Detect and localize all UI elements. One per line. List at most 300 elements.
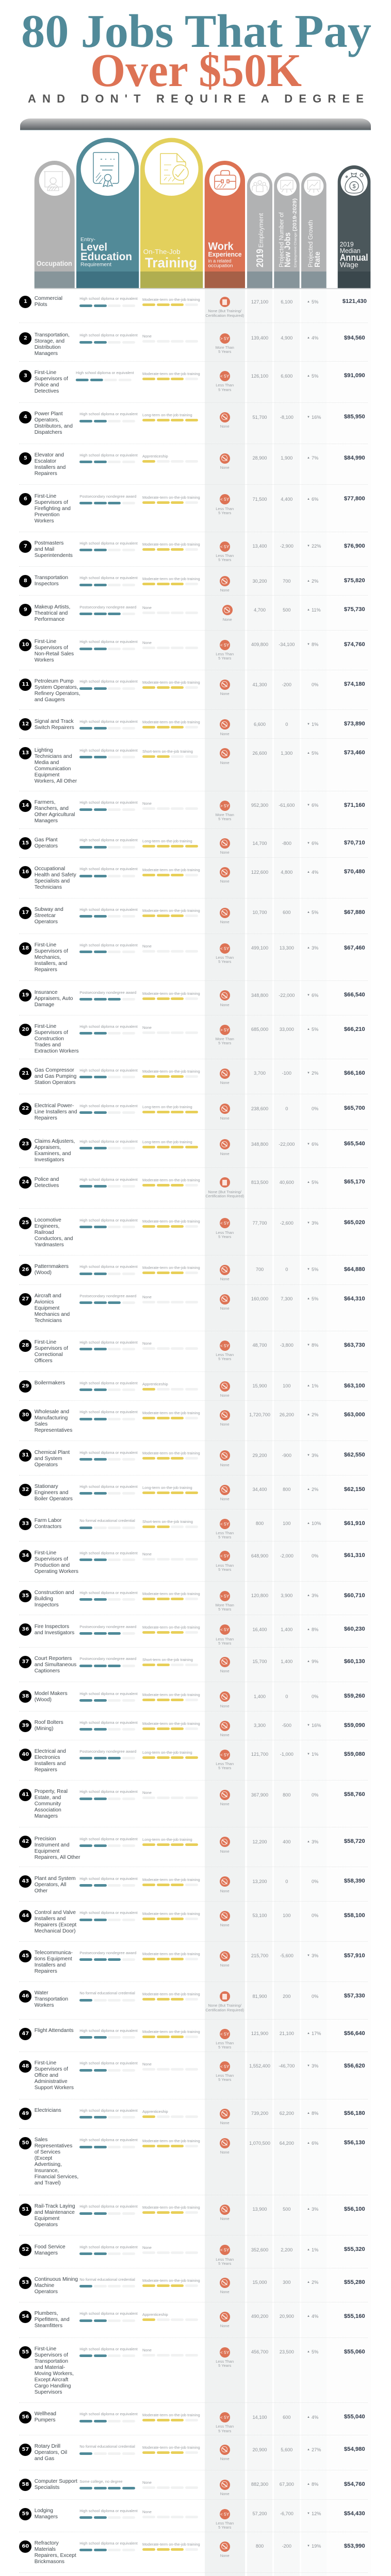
icon: experience <box>220 2245 230 2255</box>
row 23: Claims Adjusters, Appraisers, Examiners, and Investigators: High school diploma or equivalent <box>79 1139 138 1144</box>
row 56: Wellhead Pumpers: 5 Years <box>218 2429 231 2433</box>
education bars <box>79 2452 135 2455</box>
training bars <box>142 419 198 421</box>
row 19: Insurance Appraisers, Auto Damage: Damage <box>35 1002 54 1008</box>
row 4: Power Plant Operators, Distributors, and Dispatchers: ▼ <box>307 415 310 418</box>
row 34: First-Line Supervisors of Production and Operating Workers: 0% <box>312 1553 318 1558</box>
row 5: Elevator and Escalator Installers and Repairers: 28,900 <box>252 455 267 461</box>
row 48: First-Line Supervisors of Office and Administrative Support Workers: Supervisors of <box>35 2066 68 2072</box>
row 35: Construction and Building Inspectors: $60,710 <box>344 1592 365 1599</box>
row 9: Makeup Artists, Theatrical and Performance: ▲ <box>307 608 310 612</box>
training bars <box>142 2486 198 2489</box>
row 13: Lighting Technicians and Media and Communication Equipment Workers: High school diploma or equivalent <box>79 748 138 753</box>
row 42: Precision Instrument and Equipment Repairers, All Other: 12,200 <box>252 1839 267 1844</box>
row 13: Lighting Technicians and Media and Communication Equipment Workers: Lighting <box>35 748 53 753</box>
row 21: Gas Compressor and Gas Pumping Station Operators: Gas Compressor <box>35 1067 74 1073</box>
title block <box>21 5 371 105</box>
icon: experience <box>220 2312 230 2322</box>
row 35: Construction and Building Inspectors: 120,800 <box>251 1593 268 1598</box>
row 56: Wellhead Pumpers <box>0 2402 391 2435</box>
panel: education header: Requirement <box>80 262 111 268</box>
education bars <box>79 2549 135 2551</box>
row 18: First-Line Supervisors of Mechanics, Installers, and Repairers: Less Than <box>216 955 234 960</box>
row 41: Property, Real Estate, and Community Association Managers: High school diploma or equivalent <box>79 1789 138 1794</box>
education bars <box>79 613 135 615</box>
row 9: Makeup Artists, Theatrical and Performance: $75,730 <box>344 606 365 613</box>
row 47: Flight Attendants: $56,640 <box>344 2030 365 2037</box>
row 2: Transportation, Storage, and Distribution Managers: 139,400 <box>251 335 268 341</box>
row 58: Computer Support Specialists: 8% <box>312 2482 318 2487</box>
row 34: First-Line Supervisors of Production and Operating Workers: Production and <box>35 1563 70 1568</box>
row 26: Patternmakers (Wood): Patternmakers <box>35 1264 69 1269</box>
row 5: Elevator and Escalator Installers and Repairers: High school diploma or equivalent <box>79 453 138 457</box>
icon: experience <box>222 605 233 615</box>
row 55: First-Line Supervisors of Transportation and Material-Moving Workers: Except Aircraft <box>35 2377 68 2383</box>
row 33: Farm Labor Contractors: 5 Years <box>218 1535 231 1539</box>
row 1: Commercial Pilots: ▲ <box>307 300 310 303</box>
row 52: Food Service Managers: 352,600 <box>251 2247 268 2252</box>
row 26: Patternmakers (Wood): $64,880 <box>344 1266 365 1273</box>
training bars <box>142 1388 198 1391</box>
row 8: Transportation Inspectors: 700 <box>283 579 290 584</box>
row 54: Plumbers, Pipefitters, and Steamfitters: Plumbers, <box>35 2311 58 2316</box>
panel: work experience header <box>205 161 245 288</box>
row 47: Flight Attendants: 47 <box>22 2031 29 2037</box>
row 11: Petroleum Pump System Operators, Refinery Operators, and Gaugers: Moderate-term on-the-job training <box>142 680 200 685</box>
row 42: Precision Instrument and Equipment Repairers, All Other: Repairers, All Other <box>35 1855 80 1860</box>
training bars <box>142 1417 198 1419</box>
row 7: Postmasters and Mail Superintendents: 7 <box>24 544 27 549</box>
education bars <box>79 1598 135 1601</box>
icon: document with check <box>160 154 188 184</box>
row 57: Rotary Drill Operators, Oil and Gas: Operators, Oil <box>35 2450 67 2455</box>
row 2: Transportation, Storage, and Distribution Managers: Distribution <box>35 345 61 350</box>
row 3: First-Line Supervisors of Police and Detectives: 3 <box>24 373 27 379</box>
row 56: Wellhead Pumpers: Pumpers <box>35 2417 55 2423</box>
training bars <box>142 1146 198 1148</box>
row 32: Stationary Engineers and Boiler Operators: Long-term on-the-job training <box>142 1485 192 1490</box>
row 45: Telecommunications Equipment Installers and Repairers: $57,910 <box>344 1953 365 1959</box>
row 7: Postmasters and Mail Superintendents: Moderate-term on-the-job training <box>142 542 200 547</box>
row 5: Elevator and Escalator Installers and Repairers: Apprenticeship <box>142 454 168 459</box>
row 15: Gas Plant Operators: Gas Plant <box>35 837 57 843</box>
education bars <box>79 2036 135 2039</box>
panel: training header: Training <box>145 255 197 270</box>
row 11: Petroleum Pump System Operators, Refinery Operators, and Gaugers: $74,180 <box>344 681 365 687</box>
row 59: Lodging Managers: 5 Years <box>218 2525 231 2530</box>
icon: experience <box>220 1381 230 1392</box>
education bars <box>79 549 135 551</box>
row 30: Wholesale and Manufacturing Sales Representatives: 30 <box>22 1412 29 1418</box>
row 23: Claims Adjusters, Appraisers, Examiners, and Investigators: 348,800 <box>251 1142 268 1147</box>
row 27: Aircraft and Avionics Equipment Mechanics and Technicians: Postsecondary nondegree award <box>79 1294 136 1298</box>
education bars <box>79 2420 135 2422</box>
icon: experience <box>220 719 230 730</box>
row 14: Farmers, Ranchers, and Other Agricultural Managers: Ranchers, and <box>35 806 69 811</box>
row 51: Rail-Track Laying and Maintenance Equipment Operators: High school diploma or equivalent <box>79 2204 138 2209</box>
row 43: Plant and System Operators, All Other: Moderate-term on-the-job training <box>142 1877 200 1882</box>
row 14: Farmers, Ranchers, and Other Agricultural Managers: 14 <box>22 803 29 808</box>
row 33: Farm Labor Contractors: Less Than <box>216 1531 234 1535</box>
row 12: Signal and Track Switch Repairers: None <box>220 732 230 736</box>
row 14: Farmers, Ranchers, and Other Agricultural Managers: $71,160 <box>344 802 365 808</box>
icon: experience: < 5Y <box>220 1627 229 1632</box>
row 53: Continuous Mining Machine Operators: $55,280 <box>344 2279 365 2285</box>
row 57: Rotary Drill Operators, Oil and Gas: None <box>220 2456 230 2461</box>
education bars <box>79 1458 135 1461</box>
row 39: Roof Bolters (Mining): 16% <box>312 1723 321 1728</box>
row 29: Boilermakers: None <box>220 1393 230 1398</box>
row 51: Rail-Track Laying and Maintenance Equipment Operators: Equipment <box>35 2216 59 2222</box>
row 46: Water Transportation Workers: 0% <box>312 1994 318 1999</box>
training bars <box>142 950 198 953</box>
row 47: Flight Attendants: Flight Attendants <box>35 2028 74 2033</box>
row 39: Roof Bolters (Mining): (Mining) <box>35 1726 53 1732</box>
row 38: Model Makers (Wood): 0 <box>285 1694 288 1699</box>
row 5: Elevator and Escalator Installers and Repairers: 5 <box>24 455 27 461</box>
row 37: Court Reporters and Simultaneous Captioners: ▲ <box>307 1660 310 1663</box>
icon: experience <box>220 2205 230 2215</box>
row 56: Wellhead Pumpers: High school diploma or equivalent <box>79 2412 138 2416</box>
row 4: Power Plant Operators, Distributors, and Dispatchers: Distributors, and <box>35 423 73 429</box>
row 38: Model Makers (Wood): (Wood) <box>35 1697 52 1703</box>
row 27: Aircraft and Avionics Equipment Mechanics and Technicians: 5% <box>312 1296 318 1301</box>
row 11: Petroleum Pump System Operators, Refinery Operators, and Gaugers: -200 <box>282 682 291 687</box>
row 55: First-Line Supervisors of Transportation and Material-Moving Workers: 55 <box>22 2349 29 2355</box>
education bars <box>79 584 135 586</box>
row 52: Food Service Managers: $55,320 <box>344 2246 365 2252</box>
row 52: Food Service Managers: 52 <box>22 2247 29 2252</box>
panel: 2019 employment header <box>247 173 272 288</box>
education bars <box>79 915 135 918</box>
education bars <box>79 1999 135 2002</box>
row 58: Computer Support Specialists: None <box>220 2492 230 2496</box>
row 55: First-Line Supervisors of Transportation and Material-Moving Workers: 456,700 <box>251 2349 268 2354</box>
row 8: Transportation Inspectors: ▲ <box>307 580 310 583</box>
row 40: Electrical and Electronics Installers and Repairers: 5 Years <box>218 1766 231 1770</box>
row 14: Farmers, Ranchers, and Other Agricultural Managers: 952,300 <box>251 803 268 808</box>
row 34: First-Line Supervisors of Production and Operating Workers <box>0 1541 391 1581</box>
row 38: Model Makers (Wood): None <box>220 1704 230 1708</box>
row 30: Wholesale and Manufacturing Sales Representatives: None <box>220 1422 230 1427</box>
row 39: Roof Bolters (Mining): -500 <box>282 1723 291 1728</box>
row 59: Lodging Managers: High school diploma or equivalent <box>79 2509 138 2513</box>
row 6: First-Line Supervisors of Firefighting and Prevention Workers: $77,800 <box>344 496 365 502</box>
row 56: Wellhead Pumpers: Moderate-term on-the-job training <box>142 2413 200 2417</box>
row 36: Fire Inspectors and Investigators: 5 Years <box>218 1641 231 1646</box>
row 2: Transportation, Storage, and Distribution Managers: High school diploma or equivalent <box>79 333 138 337</box>
row 53: Continuous Mining Machine Operators: Machine <box>35 2283 54 2289</box>
row 33: Farm Labor Contractors: Farm Labor <box>35 1518 61 1523</box>
row 15: Gas Plant Operators <box>0 828 391 857</box>
row 59: Lodging Managers: $54,430 <box>344 2510 365 2516</box>
row 20: First-Line Supervisors of Construction Trades and Extraction Workers: ▲ <box>307 1028 310 1031</box>
row 59: Lodging Managers: Less Than <box>216 2521 234 2526</box>
row 40: Electrical and Electronics Installers and Repairers: 1% <box>312 1752 318 1757</box>
row 5: Elevator and Escalator Installers and Repairers: ▲ <box>307 456 310 460</box>
icon: experience <box>220 412 230 422</box>
row 1: Commercial Pilots <box>0 287 391 324</box>
row 9: Makeup Artists, Theatrical and Performance: Performance <box>35 617 64 622</box>
icon: experience <box>220 1837 230 1847</box>
row 55: First-Line Supervisors of Transportation and Material-Moving Workers: $55,060 <box>344 2349 365 2355</box>
row 32: Stationary Engineers and Boiler Operators: ▲ <box>307 1488 310 1491</box>
row 23: Claims Adjusters, Appraisers, Examiners, and Investigators: 23 <box>22 1141 29 1147</box>
row 32: Stationary Engineers and Boiler Operators: $62,150 <box>344 1486 365 1493</box>
row 21: Gas Compressor and Gas Pumping Station Operators: High school diploma or equivalent <box>79 1068 138 1073</box>
row 45: Telecommunications Equipment Installers and Repairers: ▼ <box>307 1954 310 1957</box>
icon: experience: < 5Y <box>220 1553 229 1558</box>
row 27: Aircraft and Avionics Equipment Mechanics and Technicians: 7,300 <box>281 1296 292 1301</box>
row 6: First-Line Supervisors of Firefighting and Prevention Workers: Less Than <box>216 506 234 511</box>
row 23: Claims Adjusters, Appraisers, Examiners, and Investigators: 6% <box>312 1142 318 1147</box>
row 19: Insurance Appraisers, Auto Damage <box>0 980 391 1014</box>
row 50: Sales Representatives of Services: Financial Services, <box>35 2174 78 2180</box>
row 12: Signal and Track Switch Repairers: High school diploma or equivalent <box>79 719 138 724</box>
row 37: Court Reporters and Simultaneous Captioners: 9% <box>312 1659 318 1664</box>
row 55: First-Line Supervisors of Transportation and Material-Moving Workers: Less Than <box>216 2359 234 2364</box>
icon: experience <box>220 1551 230 1561</box>
row 11: Petroleum Pump System Operators, Refinery Operators, and Gaugers: and Gaugers <box>35 697 65 703</box>
row 16: Occupational Health and Safety Specialists and Technicians: 4% <box>312 870 318 875</box>
row 51: Rail-Track Laying and Maintenance Equipment Operators: ▲ <box>307 2208 310 2211</box>
row 50: Sales Representatives of Services: $56,130 <box>344 2140 365 2146</box>
row 8: Transportation Inspectors <box>0 566 391 595</box>
row 38: Model Makers (Wood): Model Makers <box>35 1691 68 1697</box>
row 59: Lodging Managers: 59 <box>22 2511 29 2516</box>
education bars <box>79 502 135 504</box>
training bars <box>142 340 198 343</box>
row 25: Locomotive Engineers, Railroad Conductors, and Yardmasters: Railroad <box>35 1230 54 1235</box>
icon: experience <box>220 541 230 552</box>
row 36: Fire Inspectors and Investigators: ▲ <box>307 1628 310 1631</box>
icon: experience <box>220 2541 230 2552</box>
row 36: Fire Inspectors and Investigators: 1,400 <box>281 1627 292 1632</box>
row 21: Gas Compressor and Gas Pumping Station Operators: 21 <box>22 1071 29 1076</box>
education bars <box>79 2516 135 2519</box>
row 34: First-Line Supervisors of Production and Operating Workers: Supervisors of <box>35 1556 68 1562</box>
education bars <box>79 1844 135 1847</box>
row 56: Wellhead Pumpers: ▲ <box>307 2415 310 2418</box>
row 41: Property, Real Estate, and Community Association Managers: Association <box>35 1807 61 1813</box>
education bars <box>79 420 135 422</box>
row 25: Locomotive Engineers, Railroad Conductors, and Yardmasters: Conductors, and <box>35 1236 73 1242</box>
row 16: Occupational Health and Safety Specialists and Technicians: 4,800 <box>281 870 292 875</box>
row 8: Transportation Inspectors: High school diploma or equivalent <box>79 575 138 580</box>
row 20: First-Line Supervisors of Construction Trades and Extraction Workers: 5 Years <box>218 1041 231 1045</box>
icon: experience <box>220 2412 230 2422</box>
row 6: First-Line Supervisors of Firefighting and Prevention Workers: Firefighting and <box>35 506 71 512</box>
row 60: Refractory Materials Repairers, Except Brickmasons: 19% <box>312 2544 321 2549</box>
row 39: Roof Bolters (Mining): Moderate-term on-the-job training <box>142 1721 200 1726</box>
row 10: First-Line Supervisors of Non-Retail Sales Workers: 409,800 <box>251 642 268 647</box>
row 58: Computer Support Specialists: Specialists <box>35 2485 59 2490</box>
row 30: Wholesale and Manufacturing Sales Representatives: Wholesale and <box>35 1409 69 1415</box>
row 6: First-Line Supervisors of Firefighting and Prevention Workers: Prevention <box>35 512 59 518</box>
row 57: Rotary Drill Operators, Oil and Gas: Moderate-term on-the-job training <box>142 2445 200 2450</box>
row 10: First-Line Supervisors of Non-Retail Sales Workers: First-Line <box>35 639 56 645</box>
row 22: Electrical Power-Line Installers and Repairers: $65,700 <box>344 1105 365 1111</box>
row 60: Refractory Materials Repairers, Except Brickmasons: Repairers, Except <box>35 2553 76 2558</box>
row 45: Telecommunications Equipment Installers and Repairers: None <box>220 1963 230 1968</box>
row 13: Lighting Technicians and Media and Communication Equipment Workers: 5% <box>312 751 318 756</box>
row 55: First-Line Supervisors of Transportation and Material-Moving Workers: High school diploma or equivalent <box>79 2347 138 2351</box>
row 23: Claims Adjusters, Appraisers, Examiners, and Investigators: Long-term on-the-job training <box>142 1140 192 1144</box>
row 42: Precision Instrument and Equipment Repairers, All Other <box>0 1827 391 1867</box>
row 51: Rail-Track Laying and Maintenance Equipment Operators: 500 <box>283 2207 290 2212</box>
row 14: Farmers, Ranchers, and Other Agricultural Managers: None <box>142 801 152 806</box>
row 45: Telecommunications Equipment Installers and Repairers: -5,600 <box>280 1953 294 1958</box>
training bars <box>142 460 198 463</box>
row 18: First-Line Supervisors of Mechanics, Installers, and Repairers: First-Line <box>35 942 56 948</box>
panel: projected new jobs header: Employment Change <box>294 232 297 267</box>
row 58: Computer Support Specialists: $54,760 <box>344 2481 365 2487</box>
panel: education header: Level <box>80 242 107 253</box>
row 42: Precision Instrument and Equipment Repairers, All Other: None <box>220 1849 230 1854</box>
row 15: Gas Plant Operators: None <box>220 850 230 855</box>
row 54: Plumbers, Pipefitters, and Steamfitters: Apprenticeship <box>142 2312 168 2317</box>
education bars <box>79 875 135 877</box>
row 6: First-Line Supervisors of Firefighting and Prevention Workers: 4,400 <box>281 497 292 502</box>
row 39: Roof Bolters (Mining) <box>0 1710 391 1739</box>
education bars <box>79 341 135 344</box>
education bars <box>79 2252 135 2255</box>
row 6: First-Line Supervisors of Firefighting and Prevention Workers: 6% <box>312 497 318 502</box>
row 4: Power Plant Operators, Distributors, and Dispatchers <box>0 402 391 444</box>
education bars <box>79 1558 135 1561</box>
row 5: Elevator and Escalator Installers and Repairers: Escalator <box>35 459 56 464</box>
row 60: Refractory Materials Repairers, Except Brickmasons: $53,990 <box>344 2543 365 2549</box>
row 22: Electrical Power-Line Installers and Repairers: Electrical Power- <box>35 1103 74 1109</box>
row 20: First-Line Supervisors of Construction Trades and Extraction Workers <box>0 1015 391 1059</box>
education bars <box>79 1032 135 1035</box>
row 54: Plumbers, Pipefitters, and Steamfitters: Pipefitters, and <box>35 2317 70 2323</box>
row 41: Property, Real Estate, and Community Association Managers: 800 <box>283 1792 290 1797</box>
training bars <box>142 1918 198 1920</box>
panel: median wage header <box>338 165 370 288</box>
row 11: Petroleum Pump System Operators, Refinery Operators, and Gaugers: System Operators, <box>35 685 78 690</box>
row 51: Rail-Track Laying and Maintenance Equipment Operators: $56,100 <box>344 2206 365 2212</box>
icon: experience <box>220 1294 230 1304</box>
education bars <box>79 1699 135 1702</box>
row 4: Power Plant Operators, Distributors, and Dispatchers: 16% <box>312 414 321 419</box>
row 28: First-Line Supervisors of Correctional Officers: 8% <box>312 1343 318 1348</box>
panel: work experience header: Experience <box>208 250 241 258</box>
row 36: Fire Inspectors and Investigators: 16,400 <box>252 1627 267 1632</box>
row 56: Wellhead Pumpers: 56 <box>22 2414 29 2420</box>
row 40: Electrical and Electronics Installers and Repairers: Installers and <box>35 1761 66 1767</box>
row 46: Water Transportation Workers: Transportation <box>35 1996 68 2002</box>
row 50: Sales Representatives of Services: Moderate-term on-the-job training <box>142 2139 200 2143</box>
row 54: Plumbers, Pipefitters, and Steamfitters: 4% <box>312 2314 318 2319</box>
row 7: Postmasters and Mail Superintendents: Postmasters <box>35 540 63 546</box>
row 42: Precision Instrument and Equipment Repairers, All Other: ▲ <box>307 1840 310 1843</box>
row 48: First-Line Supervisors of Office and Administrative Support Workers: $56,620 <box>344 2063 365 2069</box>
row 46: Water Transportation Workers: 46 <box>22 1993 29 1999</box>
row 1: Commercial Pilots: Commercial <box>35 296 62 301</box>
row 46: Water Transportation Workers <box>0 1981 391 2019</box>
icon: experience <box>220 1341 230 1351</box>
row 7: Postmasters and Mail Superintendents: $76,900 <box>344 543 365 549</box>
row 59: Lodging Managers: Lodging <box>35 2508 53 2514</box>
row 58: Computer Support Specialists <box>0 2470 391 2499</box>
education bars <box>79 1798 135 1800</box>
row 30: Wholesale and Manufacturing Sales Representatives: Sales <box>35 1421 47 1427</box>
panel: projected growth header: Rate <box>314 251 322 267</box>
education bars <box>75 379 131 381</box>
education bars <box>79 808 135 811</box>
education bars <box>79 687 135 690</box>
row 8: Transportation Inspectors: 2% <box>312 579 318 584</box>
education bars <box>79 2487 135 2489</box>
row 48: First-Line Supervisors of Office and Administrative Support Workers: 3% <box>312 2063 318 2069</box>
row 50: Sales Representatives of Services: Sales <box>35 2137 47 2143</box>
row 50: Sales Representatives of Services: 50 <box>22 2140 29 2146</box>
row 10: First-Line Supervisors of Non-Retail Sales Workers: Supervisors of <box>35 645 68 651</box>
row 50: Sales Representatives of Services: High school diploma or equivalent <box>79 2138 138 2142</box>
row 1: Commercial Pilots: 5% <box>312 299 318 304</box>
row 37: Court Reporters and Simultaneous Captioners: 1,400 <box>281 1659 292 1664</box>
row 10: First-Line Supervisors of Non-Retail Sales Workers: Workers <box>35 657 54 663</box>
training bars <box>142 1797 198 1799</box>
row 7: Postmasters and Mail Superintendents: 13,400 <box>252 544 267 549</box>
row 16: Occupational Health and Safety Specialists and Technicians: Technicians <box>35 885 62 890</box>
icon: experience <box>220 1139 230 1149</box>
row 35: Construction and Building Inspectors: Moderate-term on-the-job training <box>142 1591 200 1596</box>
education bars <box>79 1527 135 1529</box>
row 34: First-Line Supervisors of Production and Operating Workers: First-Line <box>35 1550 56 1556</box>
row 20: First-Line Supervisors of Construction Trades and Extraction Workers: 685,000 <box>251 1027 268 1032</box>
row 40: Electrical and Electronics Installers and Repairers: Long-term on-the-job training <box>142 1750 192 1755</box>
row 19: Insurance Appraisers, Auto Damage: -22,000 <box>279 993 295 998</box>
row 23: Claims Adjusters, Appraisers, Examiners, and Investigators: ▼ <box>307 1143 310 1146</box>
row 16: Occupational Health and Safety Specialists and Technicians: Occupational <box>35 866 65 872</box>
training bars <box>142 1492 198 1494</box>
row 17: Subway and Streetcar Operators: Moderate-term on-the-job training <box>142 908 200 913</box>
icon: experience: < 5Y <box>220 1752 229 1757</box>
row 26: Patternmakers (Wood): None <box>220 1277 230 1281</box>
row 58: Computer Support Specialists: 67,300 <box>280 2482 294 2487</box>
row 50: Sales Representatives of Services: (Except <box>35 2156 52 2161</box>
row 15: Gas Plant Operators: $70,710 <box>344 840 365 846</box>
row 6: First-Line Supervisors of Firefighting and Prevention Workers: ▲ <box>307 498 310 501</box>
training bars <box>142 997 198 1000</box>
icon: experience: < 5Y <box>220 2031 229 2037</box>
education bars <box>79 1919 135 1921</box>
row 61: Aircraft Cargo Handling Supervisors <box>0 2572 391 2576</box>
row 9: Makeup Artists, Theatrical and Performance: Postsecondary nondegree award <box>79 605 136 609</box>
panel: occupation header: Occupation <box>37 260 72 267</box>
panel: education header <box>76 138 139 288</box>
row 13: Lighting Technicians and Media and Communication Equipment Workers: Workers, All Other <box>35 778 77 784</box>
row 23: Claims Adjusters, Appraisers, Examiners, and Investigators: Investigators <box>35 1157 64 1163</box>
row 60: Refractory Materials Repairers, Except Brickmasons: -200 <box>282 2544 291 2549</box>
row 15: Gas Plant Operators: 6% <box>312 841 318 846</box>
icon: experience: > 5Y <box>220 336 229 341</box>
row 45: Telecommunications Equipment Installers and Repairers: Telecommunica- <box>35 1950 73 1956</box>
row 48: First-Line Supervisors of Office and Administrative Support Workers: -46,700 <box>279 2063 295 2069</box>
education bars <box>79 727 135 730</box>
row 14: Farmers, Ranchers, and Other Agricultural Managers: High school diploma or equivalent <box>79 800 138 805</box>
row 14: Farmers, Ranchers, and Other Agricultural Managers: More Than <box>216 812 234 817</box>
row 50: Sales Representatives of Services: None <box>220 2150 230 2155</box>
icon: experience <box>220 371 230 381</box>
row 34: First-Line Supervisors of Production and Operating Workers: -2,000 <box>280 1553 294 1558</box>
row 40: Electrical and Electronics Installers and Repairers: Postsecondary nondegree award <box>79 1749 136 1754</box>
row 28: First-Line Supervisors of Correctional Officers: $63,730 <box>344 1342 365 1348</box>
panel: education header: Entry- <box>80 236 96 243</box>
row 17: Subway and Streetcar Operators: 600 <box>283 910 290 915</box>
